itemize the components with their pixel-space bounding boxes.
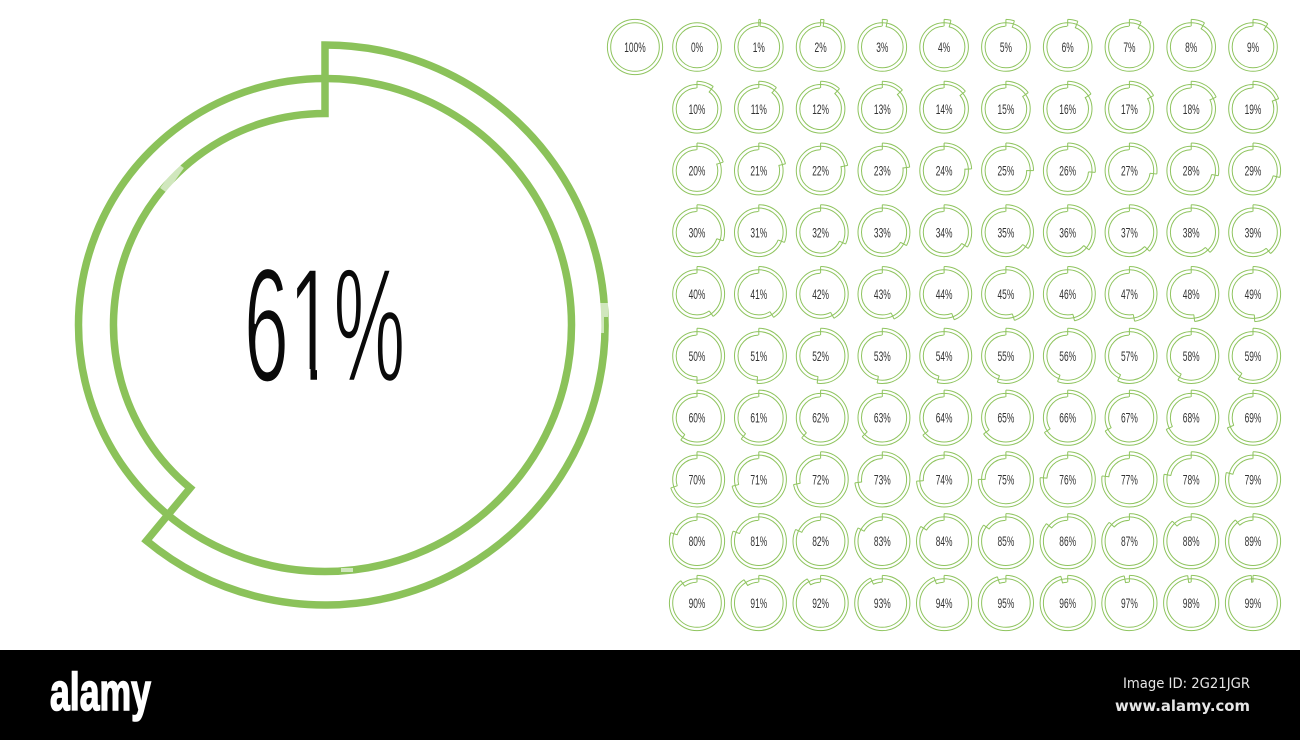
gauge 81%: 81% bbox=[750, 535, 767, 550]
gauge 25%: 25% bbox=[997, 165, 1014, 179]
gauge 80%: 80% bbox=[689, 535, 705, 550]
gauge 32%: 32% bbox=[812, 226, 829, 241]
gauge 31% bbox=[731, 205, 786, 260]
gauge 38% bbox=[1164, 205, 1219, 260]
gauge 73% bbox=[855, 452, 910, 507]
gauge 96% bbox=[1040, 575, 1095, 631]
gauge 83%: 83% bbox=[874, 535, 891, 550]
gauge 70%: 70% bbox=[689, 473, 705, 488]
gauge 59% bbox=[1225, 328, 1281, 384]
gauge 63%: 63% bbox=[874, 412, 891, 426]
large gauge: 61% bbox=[78, 45, 605, 605]
gauge 53%: 53% bbox=[874, 350, 891, 365]
gauge 9% bbox=[1225, 19, 1281, 75]
gauge 14% bbox=[916, 81, 972, 136]
gauge 46% bbox=[1040, 266, 1095, 322]
gauge 83% bbox=[855, 514, 910, 569]
gauge 39% bbox=[1225, 205, 1281, 260]
gauge 3% bbox=[855, 19, 910, 75]
gauge 74% bbox=[916, 452, 972, 507]
gauge 7% bbox=[1102, 19, 1157, 75]
gauge 71% bbox=[731, 452, 786, 507]
gauge 44% bbox=[916, 266, 972, 322]
gauge 63% bbox=[855, 390, 910, 445]
gauge 87% bbox=[1102, 514, 1157, 569]
gauge 40%: 40% bbox=[689, 288, 705, 303]
gauge 86% bbox=[1040, 514, 1095, 569]
gauge 2% bbox=[793, 19, 848, 75]
gauge 74%: 74% bbox=[936, 473, 953, 488]
gauge 10%: 10% bbox=[689, 103, 705, 117]
gauge 47% bbox=[1102, 266, 1157, 322]
gauge 21% bbox=[731, 143, 786, 198]
gauge 34% bbox=[916, 205, 972, 260]
gauge 6%: 6% bbox=[1062, 41, 1074, 56]
gauge 86%: 86% bbox=[1059, 535, 1076, 550]
gauge 45% bbox=[978, 266, 1034, 322]
gauge 24%: 24% bbox=[936, 165, 953, 179]
gauge 57%: 57% bbox=[1121, 350, 1138, 365]
gauge 78%: 78% bbox=[1183, 473, 1200, 488]
gauge 36%: 36% bbox=[1059, 226, 1076, 241]
gauge 68% bbox=[1164, 390, 1219, 445]
gauge 20%: 20% bbox=[689, 165, 705, 179]
gauge 87%: 87% bbox=[1121, 535, 1138, 550]
gauge 97%: 97% bbox=[1121, 597, 1138, 612]
gauge 28%: 28% bbox=[1183, 165, 1200, 179]
gauge 73%: 73% bbox=[874, 473, 891, 488]
gauge 52% bbox=[793, 328, 848, 384]
gauge 67%: 67% bbox=[1121, 412, 1138, 426]
gauge 71%: 71% bbox=[750, 473, 767, 488]
gauge 62%: 62% bbox=[812, 412, 829, 426]
gauge 18% bbox=[1164, 81, 1219, 136]
gauge 26%: 26% bbox=[1059, 165, 1076, 179]
gauge 0% bbox=[673, 23, 721, 71]
gauge 38%: 38% bbox=[1183, 226, 1200, 241]
gauge 90% bbox=[669, 575, 725, 631]
gauge 79% bbox=[1225, 452, 1281, 507]
gauge 72%: 72% bbox=[812, 473, 829, 488]
small gauges grid bbox=[607, 19, 1281, 631]
gauge 9%: 9% bbox=[1247, 41, 1259, 56]
gauge 52%: 52% bbox=[812, 350, 829, 365]
gauge 30% bbox=[669, 205, 725, 260]
gauge 99%: 99% bbox=[1245, 597, 1261, 612]
gauge 0%: 0% bbox=[691, 41, 703, 56]
gauge 17% bbox=[1102, 81, 1157, 136]
gauge 1%: 1% bbox=[753, 41, 765, 56]
image id: Image ID: 2G21JGR bbox=[1123, 676, 1250, 692]
footer band bbox=[0, 650, 1300, 740]
gauge 94% bbox=[916, 575, 972, 631]
gauge 7%: 7% bbox=[1123, 41, 1135, 56]
gauge 18%: 18% bbox=[1183, 103, 1200, 117]
gauge 88% bbox=[1164, 514, 1219, 569]
gauge 58%: 58% bbox=[1183, 350, 1200, 365]
gauge 27%: 27% bbox=[1121, 165, 1138, 179]
gauge 81% bbox=[731, 514, 786, 569]
watermark fragments bbox=[143, 163, 608, 572]
gauge 22%: 22% bbox=[812, 165, 829, 179]
gauge 49% bbox=[1225, 266, 1281, 322]
gauge 53% bbox=[855, 328, 910, 384]
gauge 80% bbox=[669, 514, 725, 569]
gauge 97% bbox=[1102, 575, 1157, 631]
gauge 4%: 4% bbox=[938, 41, 950, 56]
gauge 16%: 16% bbox=[1059, 103, 1076, 117]
gauge 91% bbox=[731, 575, 786, 631]
gauge 70% bbox=[669, 452, 725, 507]
gauge 54% bbox=[916, 328, 972, 384]
gauge 29%: 29% bbox=[1245, 165, 1261, 179]
gauge 14%: 14% bbox=[936, 103, 953, 117]
gauge 3%: 3% bbox=[876, 41, 888, 56]
gauge 30%: 30% bbox=[689, 226, 705, 241]
gauge 23% bbox=[855, 143, 910, 198]
gauge 59%: 59% bbox=[1245, 350, 1261, 365]
gauge 64%: 64% bbox=[936, 412, 953, 426]
gauge 11%: 11% bbox=[751, 103, 767, 117]
gauge 90%: 90% bbox=[689, 597, 705, 612]
gauge 28% bbox=[1164, 143, 1219, 198]
large gauge middle ring bbox=[78, 78, 572, 572]
gauge 35% bbox=[978, 205, 1034, 260]
gauge 15%: 15% bbox=[997, 103, 1014, 117]
gauge 61% bbox=[731, 390, 786, 445]
gauge 100%: 100% bbox=[624, 41, 646, 56]
gauge 55% bbox=[978, 328, 1034, 384]
gauge 19%: 19% bbox=[1245, 103, 1261, 117]
gauge 51%: 51% bbox=[750, 350, 767, 365]
gauge 55%: 55% bbox=[997, 350, 1014, 365]
gauge 23%: 23% bbox=[874, 165, 891, 179]
gauge 43%: 43% bbox=[874, 288, 891, 303]
gauge 21%: 21% bbox=[750, 165, 767, 179]
gauge 91%: 91% bbox=[750, 597, 767, 612]
gauge 66% bbox=[1040, 390, 1095, 445]
gauge 37%: 37% bbox=[1121, 226, 1138, 241]
gauge 20% bbox=[669, 143, 725, 198]
gauge 8%: 8% bbox=[1185, 41, 1197, 56]
gauge 96%: 96% bbox=[1059, 597, 1076, 612]
gauge 50% bbox=[669, 328, 725, 384]
gauge 15% bbox=[978, 81, 1034, 136]
gauge 24% bbox=[916, 143, 972, 198]
gauge 75%: 75% bbox=[997, 473, 1014, 488]
gauge 26% bbox=[1040, 143, 1095, 198]
gauge 33% bbox=[855, 205, 910, 260]
gauge 93% bbox=[855, 575, 910, 631]
gauge 94%: 94% bbox=[936, 597, 953, 612]
gauge 62% bbox=[793, 390, 848, 445]
gauge 8% bbox=[1164, 19, 1219, 75]
gauge 76% bbox=[1040, 452, 1095, 507]
gauge 85%: 85% bbox=[997, 535, 1014, 550]
gauge 1% bbox=[731, 19, 786, 75]
gauge 61%: 61% bbox=[750, 412, 767, 426]
gauge 78% bbox=[1164, 452, 1219, 507]
gauge 93%: 93% bbox=[874, 597, 891, 612]
footer logo: alamy bbox=[50, 662, 151, 722]
gauge 98%: 98% bbox=[1183, 597, 1200, 612]
gauge 48%: 48% bbox=[1183, 288, 1200, 303]
gauge 75% bbox=[978, 452, 1034, 507]
gauge 19% bbox=[1225, 81, 1281, 136]
gauge 72% bbox=[793, 452, 848, 507]
gauge 84%: 84% bbox=[936, 535, 953, 550]
gauge 68%: 68% bbox=[1183, 412, 1200, 426]
gauge 12% bbox=[793, 81, 848, 136]
gauge 95% bbox=[978, 575, 1034, 631]
gauge 51% bbox=[731, 328, 786, 384]
gauge 37% bbox=[1102, 205, 1157, 260]
gauge 33%: 33% bbox=[874, 226, 891, 241]
gauge 42% bbox=[793, 266, 848, 322]
gauge 41% bbox=[731, 266, 786, 322]
large gauge value: 61% bbox=[244, 235, 405, 416]
gauge 66%: 66% bbox=[1059, 412, 1076, 426]
gauge 34%: 34% bbox=[936, 226, 953, 241]
gauge 69%: 69% bbox=[1245, 412, 1261, 426]
gauge 65% bbox=[978, 390, 1034, 445]
gauge 5% bbox=[978, 19, 1034, 75]
gauge 6% bbox=[1040, 19, 1095, 75]
gauge 29% bbox=[1225, 143, 1281, 198]
gauge 16% bbox=[1040, 81, 1095, 136]
gauge 11% bbox=[731, 81, 786, 136]
gauge 27% bbox=[1102, 143, 1157, 198]
gauge 48% bbox=[1164, 266, 1219, 322]
gauge 88%: 88% bbox=[1183, 535, 1200, 550]
gauge 64% bbox=[916, 390, 972, 445]
gauge 100% bbox=[607, 19, 663, 75]
gauge 31%: 31% bbox=[750, 226, 767, 241]
gauge 45%: 45% bbox=[997, 288, 1014, 303]
gauge 2%: 2% bbox=[815, 41, 827, 56]
gauge 89%: 89% bbox=[1245, 535, 1261, 550]
gauge 60%: 60% bbox=[689, 412, 705, 426]
gauge 42%: 42% bbox=[812, 288, 829, 303]
gauge 85% bbox=[978, 514, 1034, 569]
gauge 77% bbox=[1102, 452, 1157, 507]
gauge 69% bbox=[1225, 390, 1281, 445]
website: www.alamy.com bbox=[1115, 697, 1250, 715]
gauge 22% bbox=[793, 143, 848, 198]
gauge 43% bbox=[855, 266, 910, 322]
gauge 82% bbox=[793, 514, 848, 569]
gauge 41%: 41% bbox=[750, 288, 767, 303]
gauge 65%: 65% bbox=[997, 412, 1014, 426]
gauge 79%: 79% bbox=[1245, 473, 1261, 488]
gauge 77%: 77% bbox=[1121, 473, 1138, 488]
gauge 44%: 44% bbox=[936, 288, 953, 303]
gauge 25% bbox=[978, 143, 1034, 198]
gauge 82%: 82% bbox=[812, 535, 829, 550]
gauge 46%: 46% bbox=[1059, 288, 1076, 303]
gauge 57% bbox=[1102, 328, 1157, 384]
gauge 5%: 5% bbox=[1000, 41, 1012, 56]
gauge 58% bbox=[1164, 328, 1219, 384]
gauge 54%: 54% bbox=[936, 350, 953, 365]
gauge 56% bbox=[1040, 328, 1095, 384]
gauge 47%: 47% bbox=[1121, 288, 1138, 303]
gauge 67% bbox=[1102, 390, 1157, 445]
gauge 13% bbox=[855, 81, 910, 136]
gauge 35%: 35% bbox=[997, 226, 1014, 241]
large gauge progress outline bbox=[113, 45, 605, 605]
gauge 95%: 95% bbox=[997, 597, 1014, 612]
gauge 98% bbox=[1164, 575, 1219, 631]
gauge 92% bbox=[793, 575, 848, 631]
gauge 56%: 56% bbox=[1059, 350, 1076, 365]
gauge 84% bbox=[916, 514, 972, 569]
gauge 12%: 12% bbox=[812, 103, 829, 117]
gauge 50%: 50% bbox=[689, 350, 705, 365]
gauge 17%: 17% bbox=[1121, 103, 1138, 117]
gauge 4% bbox=[916, 19, 972, 75]
gauge 99% bbox=[1225, 575, 1281, 631]
gauge 60% bbox=[669, 390, 725, 445]
gauge 36% bbox=[1040, 205, 1095, 260]
gauge 40% bbox=[669, 266, 725, 322]
gauge 76%: 76% bbox=[1059, 473, 1076, 488]
gauge 89% bbox=[1225, 514, 1281, 569]
gauge 10% bbox=[669, 81, 725, 136]
gauge 13%: 13% bbox=[874, 103, 891, 117]
gauge 92%: 92% bbox=[812, 597, 829, 612]
gauge 39%: 39% bbox=[1245, 226, 1261, 241]
gauge 49%: 49% bbox=[1245, 288, 1261, 303]
foot of the large numeral 1 removed bbox=[294, 369, 333, 384]
gauge 32% bbox=[793, 205, 848, 260]
